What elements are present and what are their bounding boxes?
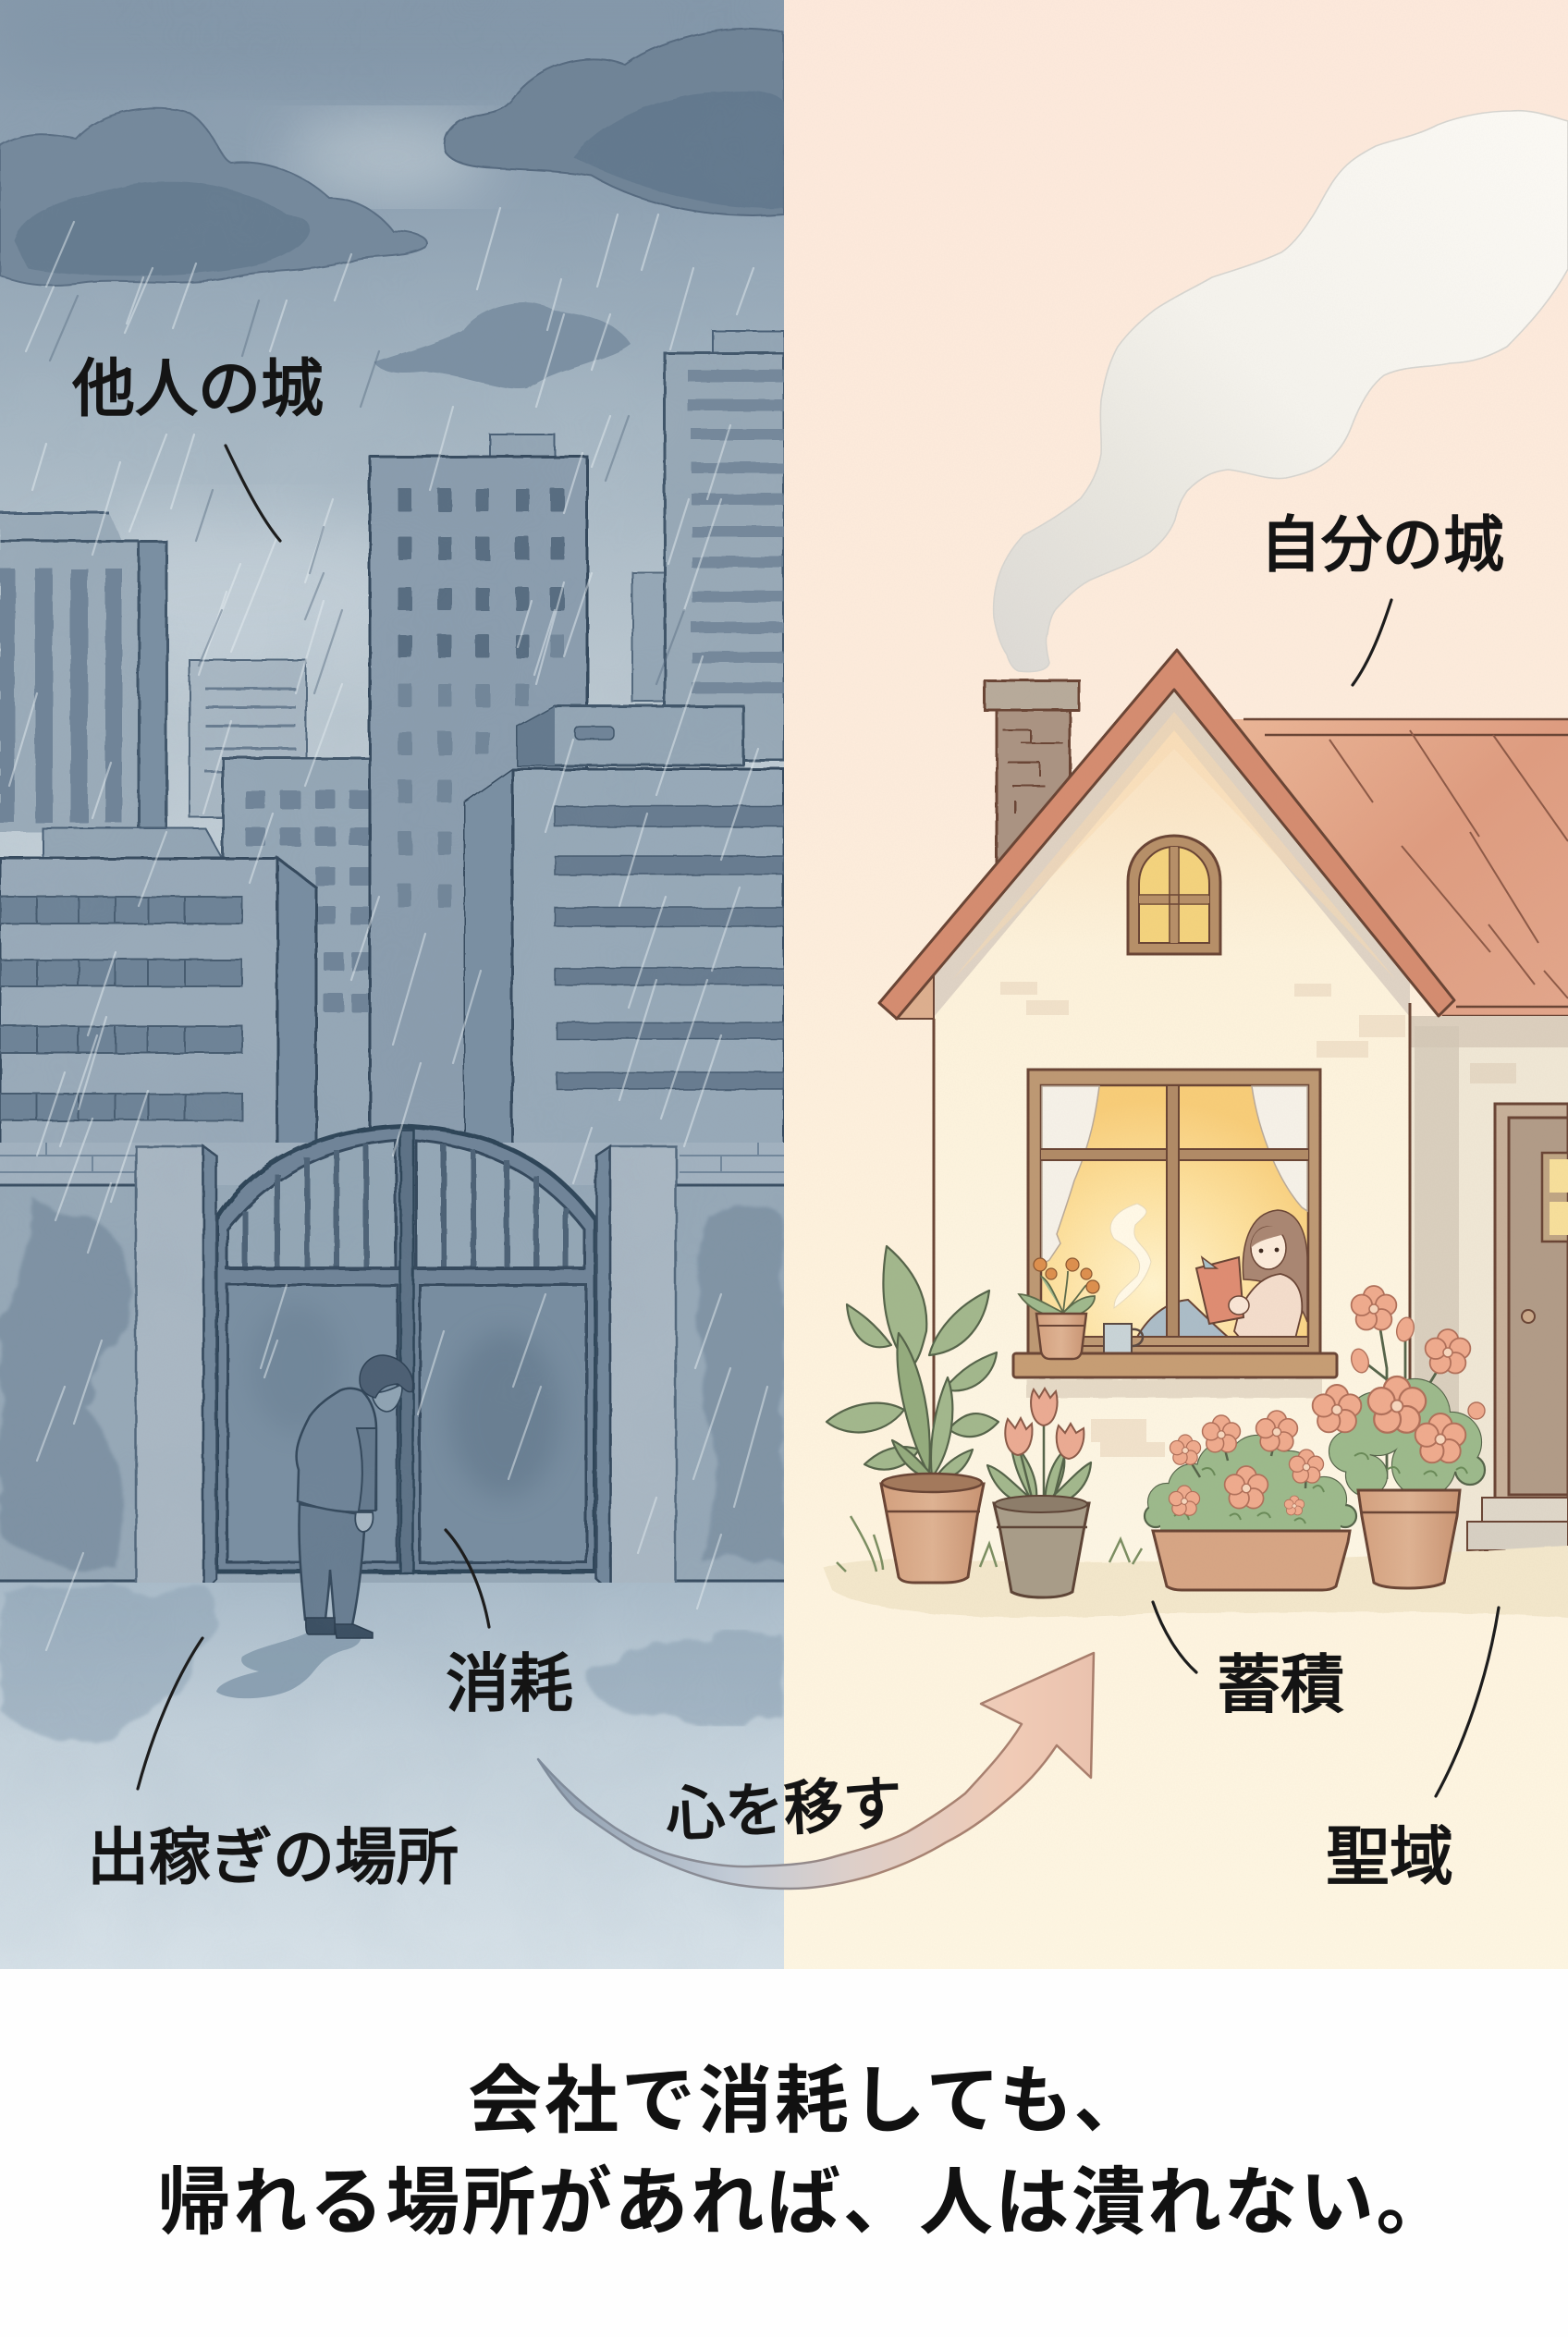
girl reading a book [1196,1210,1307,1342]
curtain: left [1042,1086,1099,1265]
figure: man with bowed head and his shadow [216,1355,413,1698]
building: left tall block [0,513,166,832]
roof: gable front band [879,650,1454,1019]
center mullion [1167,1085,1179,1342]
big window with warm light [1013,1070,1337,1398]
cloud: small distant cloud [374,302,631,389]
rain: light streaks [9,208,767,1650]
attic arched window [1128,836,1220,954]
label: 心を移す: 心を移す [664,1769,904,1849]
ground patch under plants [824,1546,1568,1618]
label: 蓄積: 蓄積 [1217,1649,1344,1720]
chimney [985,680,1079,863]
leader line: 自分の城 [1353,600,1391,685]
smoke from chimney [994,111,1568,672]
arrow: moving the heart from left to right [538,1653,1094,1889]
building: front right office block [465,706,784,1146]
roof: rear slope [1231,719,1568,1016]
rain: dark streaks [50,296,684,693]
gate: double arched iron gate [216,1126,595,1573]
label: 他人の城: 他人の城 [72,354,324,424]
building: far right tower [632,331,784,760]
label: 聖域: 聖域 [1326,1821,1453,1892]
plant: flower planter box [1145,1411,1356,1590]
leader line: 出稼ぎの場所 [138,1638,202,1789]
building: low background block [190,660,306,817]
plant: tulips in grey pot [987,1389,1091,1597]
house: right wing wall [1410,1016,1568,1561]
plant: flowers in terracotta pot [1313,1286,1485,1588]
watercolor mottling left [0,0,784,1969]
blanket [1134,1300,1234,1342]
window sill plant [1019,1258,1099,1359]
panel: right warm home scene [784,0,1568,1969]
building: middle windowed block [223,758,373,1156]
leader line: 消耗 [446,1530,489,1627]
ground: wet pavement [0,1583,784,1969]
sill [1013,1353,1337,1377]
curtain: right [1252,1086,1307,1211]
label: 出稼ぎの場所: 出稼ぎの場所 [87,1823,459,1892]
caption line 1: 会社で消耗しても、 [468,2060,1150,2142]
panel: left rainy city scene [0,0,784,1969]
plant: tall leafy plant [827,1246,1142,1583]
door with window and steps [1467,1104,1568,1550]
steam [1110,1204,1151,1308]
caption line 2: 帰れる場所があれば、人は潰れない。 [157,2161,1452,2244]
label: 自分の城: 自分の城 [1260,510,1504,579]
caption panel [0,1969,1568,2337]
house: main wall with gable [897,690,1410,1560]
building: central tall tower [370,434,587,1141]
label: 消耗: 消耗 [446,1648,573,1719]
building: front left office block [0,828,316,1146]
leader line: 聖域 [1436,1608,1499,1796]
leader line: 他人の城 [226,446,280,541]
cloud: upper left storm cloud [0,108,427,285]
leader line: 蓄積 [1153,1602,1196,1672]
wall: brick band and boundary wall [0,1143,784,1583]
cloud: upper right storm cloud [445,29,784,215]
mug [1104,1324,1143,1357]
gate pillars [136,1146,676,1592]
